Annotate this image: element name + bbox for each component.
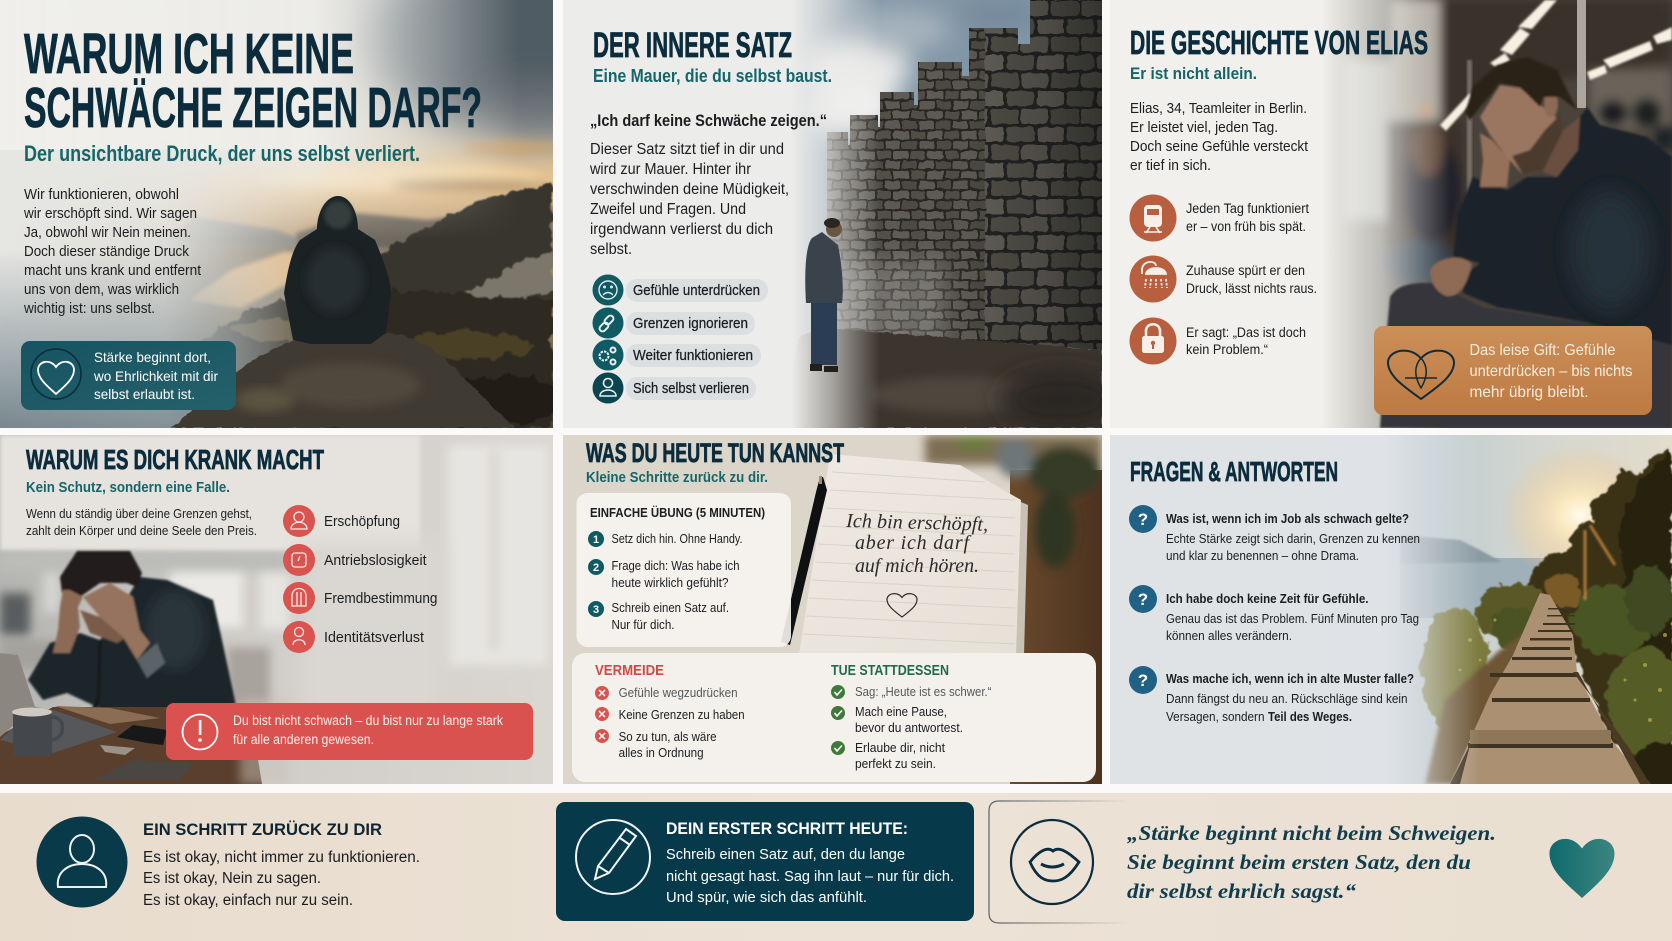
column: Tue stattdessen: bevor du antwortest. (855, 721, 963, 735)
card: simple exercise (576, 493, 791, 647)
list: consequences: Erschöpfung (324, 514, 400, 530)
list: daily pressure: kein Problem.“ (1186, 342, 1268, 357)
title: DER INNERE SATZ (593, 26, 792, 65)
list: daily pressure: er – von früh bis spät. (1186, 219, 1306, 234)
icon: drawn heart (887, 594, 917, 617)
photo: blurred office (0, 435, 553, 784)
card: simple exercise: Schreib einen Satz auf. (612, 601, 729, 615)
list: behaviours: Sich selbst verlieren (633, 381, 749, 397)
icon: warning (182, 714, 218, 750)
list: consequences: Identitätsverlust (324, 630, 424, 646)
body text: Zweifel und Fragen. Und (590, 201, 746, 218)
column: Tue stattdessen (831, 662, 992, 771)
card: simple exercise: 1 (593, 534, 599, 546)
icon: padlock (1142, 324, 1164, 353)
card: simple exercise: 3 (593, 604, 599, 616)
callout: Das leise Gift: Das leise Gift: Gefühle (1470, 342, 1616, 359)
column: Vermeide: alles in Ordnung (619, 746, 704, 760)
footer band (0, 793, 1672, 941)
faq item 1 (1129, 505, 1420, 563)
photo: man facing wall (805, 218, 843, 372)
faq item 1: Was ist, wenn ich im Job als schwach gelte? (1166, 512, 1409, 526)
faq item 3 (1129, 666, 1414, 724)
photo: wooden table and plant (563, 435, 1102, 784)
intro text: wir erschöpft sind. Wir sagen (23, 206, 197, 222)
body text: selbst. (590, 241, 632, 258)
callout: Du bist nicht schwach (166, 703, 533, 760)
body text: irgendwann verlierst du dich (590, 221, 773, 238)
photo: rock (171, 333, 514, 428)
subtitle: Er ist nicht allein. (1130, 64, 1257, 83)
title: DIE GESCHICHTE VON ELIAS (1130, 24, 1428, 61)
faq item 1: ? (1138, 510, 1148, 529)
title: FRAGEN & ANTWORTEN (1130, 456, 1338, 487)
icon: teal heart (1550, 839, 1614, 898)
block: Dein erster Schritt heute: nicht gesagt hast. Sag ihn laut – nur für dich. (666, 868, 954, 885)
title: SCHWÄCHE ZEIGEN DARF? (24, 76, 482, 140)
list: daily pressure: Jeden Tag funktioniert (1186, 201, 1309, 216)
list: behaviours: Grenzen ignorieren (633, 316, 748, 332)
column: Vermeide: Gefühle wegzudrücken (619, 686, 738, 700)
column: Vermeide: Keine Grenzen zu haben (619, 708, 745, 722)
column: Vermeide: VERMEIDE (595, 662, 664, 679)
intro text: macht uns krank und entfernt (24, 263, 201, 279)
title: WARUM ICH KEINE (24, 22, 354, 86)
icon: sad face (599, 281, 617, 299)
icon: broken chain (598, 314, 615, 333)
list: daily pressure: Er sagt: „Das ist doch (1186, 325, 1306, 340)
icon: heart with bottle (1388, 351, 1454, 399)
photo: desk, laptop and mug (0, 653, 262, 784)
icon: heart (38, 362, 74, 394)
story text: Er leistet viel, jeden Tag. (1130, 120, 1278, 136)
panel: Warum es dich krank macht (0, 435, 553, 784)
block: Ein Schritt zurück zu dir: Es ist okay, nicht immer zu funktionieren. (143, 849, 420, 866)
intro text: wichtig ist: uns selbst. (23, 301, 155, 317)
card: simple exercise: Nur für dich. (612, 618, 674, 632)
faq item 3: Dann fängst du neu an. Rückschläge sind kein (1166, 692, 1408, 706)
faq item 2 (1129, 585, 1419, 643)
faq item 2: Ich habe doch keine Zeit für Gefühle. (1166, 592, 1368, 606)
list: consequences (283, 505, 438, 653)
list: behaviours (592, 274, 768, 404)
intro text: Wir funktionieren, obwohl (24, 187, 179, 203)
block: closing quote (989, 801, 1614, 923)
callout: Das leise Gift (1374, 326, 1652, 415)
photo: train interior (1110, 0, 1672, 428)
handwritten note (845, 510, 988, 617)
card: simple exercise: Setz dich hin. Ohne Handy. (612, 532, 742, 546)
story text (1130, 101, 1308, 174)
body text: zahlt dein Körper und deine Seele den Preis. (26, 523, 257, 538)
icon: train (1144, 205, 1162, 233)
panel: Die Geschichte von Elias (1110, 0, 1672, 428)
handwritten note: auf mich hören. (855, 555, 979, 577)
panel: Fragen und Antworten (1110, 435, 1672, 790)
column: Tue stattdessen: perfekt zu sein. (855, 757, 936, 771)
callout: Stärke beginnt dort: wo Ehrlichkeit mit dir (93, 368, 218, 384)
subtitle: Der unsichtbare Druck, der uns selbst verliert. (24, 141, 420, 166)
body text: verschwinden deine Müdigkeit, (590, 181, 789, 198)
block: Ein Schritt zurück zu dir: Es ist okay, einfach nur zu sein. (143, 892, 353, 909)
photo: stone wall and sky (563, 0, 1120, 430)
block: Ein Schritt zurück zu dir: EIN SCHRITT ZURÜCK ZU DIR (143, 820, 382, 839)
photo: notebook page (799, 454, 1028, 655)
photo: pen (781, 476, 827, 645)
body text (589, 141, 789, 258)
list: daily pressure: Druck, lässt nichts raus. (1186, 281, 1317, 296)
card: simple exercise: 2 (593, 562, 599, 574)
column: Vermeide (595, 662, 745, 760)
photo: stressed man (28, 551, 237, 720)
callout: Du bist nicht schwach: für alle anderen gewesen. (233, 732, 374, 747)
card: avoid and do instead (572, 653, 1096, 782)
photo: tired man (1380, 57, 1672, 428)
faq item 3: Was mache ich, wenn ich in alte Muster falle? (1166, 672, 1414, 686)
icon: clock (292, 553, 306, 567)
block: Dein erster Schritt heute: Schreib einen Satz auf, den du lange (666, 846, 905, 863)
faq item 3: Teil des Weges. (1268, 710, 1352, 724)
photo: person on rock above valley (0, 0, 553, 428)
block: Ein Schritt zurück zu dir: Es ist okay, Nein zu sagen. (143, 870, 321, 887)
intro text: uns von dem, was wirklich (24, 282, 179, 298)
column: Tue stattdessen: Mach eine Pause, (855, 705, 947, 719)
icon: person (58, 835, 106, 887)
list: consequences: Fremdbestimmung (324, 591, 438, 607)
icon: exhausted person (291, 512, 307, 529)
title: WAS DU HEUTE TUN KANNST (586, 438, 844, 468)
faq item 2: Genau das ist das Problem. Fünf Minuten pro Tag (1166, 612, 1419, 626)
faq item 1: und klar zu benennen – ohne Drama. (1166, 549, 1359, 563)
callout: Das leise Gift: mehr übrig bleibt. (1470, 384, 1588, 401)
icon: lips (1011, 820, 1093, 904)
faq item 2: ? (1138, 590, 1148, 609)
subtitle: Eine Mauer, die du selbst baust. (593, 66, 832, 86)
story text: Doch seine Gefühle versteckt (1130, 139, 1308, 155)
story text: Elias, 34, Teamleiter in Berlin. (1130, 101, 1307, 117)
body text (26, 506, 257, 538)
body text: Wenn du ständig über deine Grenzen gehst, (26, 506, 252, 521)
card: simple exercise: heute wirklich gefühlt? (612, 576, 729, 590)
list: daily pressure (1130, 194, 1317, 364)
callout: Stärke beginnt dort (21, 341, 236, 410)
title (24, 22, 482, 140)
photo: stepped path (1450, 593, 1650, 784)
subtitle: Kleine Schritte zurück zu dir. (586, 470, 768, 486)
panel: Was du heute tun kannst (563, 435, 1102, 784)
list: behaviours: Gefühle unterdrücken (633, 283, 760, 299)
column: Vermeide: So zu tun, als wäre (619, 730, 717, 744)
panel: Der innere Satz (563, 0, 1120, 430)
block: Dein erster Schritt heute: Und spür, wie sich das anfühlt. (666, 889, 867, 906)
photo: sun rays (1585, 525, 1615, 600)
column: Tue stattdessen: Erlaube dir, nicht (855, 741, 946, 755)
block: Dein erster Schritt heute (556, 802, 974, 921)
intro text: Ja, obwohl wir Nein meinen. (24, 225, 191, 241)
callout: Stärke beginnt dort: selbst erlaubt ist. (94, 386, 195, 402)
title: WARUM ES DICH KRANK MACHT (26, 444, 324, 475)
block: Dein erster Schritt heute: DEIN ERSTER SCHRITT HEUTE: (666, 820, 908, 838)
list: consequences: Antriebslosigkeit (324, 553, 426, 569)
card: simple exercise: Frage dich: Was habe ich (612, 559, 740, 573)
block: closing quote: Sie beginnt beim ersten Satz, den du (1127, 850, 1471, 874)
body text: Dieser Satz sitzt tief in dir und (590, 141, 784, 158)
callout: Du bist nicht schwach: Du bist nicht schwach – du bist nur zu lange stark (233, 713, 503, 728)
block: Ein Schritt zurück zu dir (36, 816, 420, 909)
block: closing quote: dir selbst ehrlich sagst.“ (1127, 879, 1357, 903)
callout: Das leise Gift: unterdrücken – bis nichts (1470, 363, 1632, 380)
photo: hooded figure (284, 196, 391, 344)
story text: er tief in sich. (1130, 158, 1211, 174)
handwritten note: Ich bin erschöpft, (845, 510, 988, 536)
column: Tue stattdessen: TUE STATTDESSEN (831, 662, 949, 679)
body text: wird zur Mauer. Hinter ihr (589, 161, 751, 178)
photo: coastal path at sunset (1110, 435, 1672, 790)
faq item 3: ? (1138, 671, 1148, 690)
faq item 3: Versagen, sondern (1166, 710, 1265, 724)
icon: cage (292, 588, 306, 606)
subtitle: Kein Schutz, sondern eine Falle. (26, 479, 230, 496)
block: closing quote: „Stärke beginnt nicht beim Schweigen. (1127, 821, 1496, 845)
icon: person (600, 378, 616, 396)
icon: fading person (293, 628, 305, 645)
handwritten note: aber ich darf (855, 532, 971, 554)
card: simple exercise: EINFACHE ÜBUNG (5 MINUTEN) (590, 505, 765, 520)
intro text (23, 187, 201, 317)
icon: gears (600, 348, 616, 364)
faq item 1: Echte Stärke zeigt sich darin, Grenzen zu kennen (1166, 532, 1420, 546)
quote: „Ich darf keine Schwäche zeigen.“ (590, 111, 827, 130)
intro text: Doch dieser ständige Druck (24, 244, 190, 260)
list: daily pressure: Zuhause spürt er den (1186, 263, 1305, 278)
photo: foliage highlights (1458, 618, 1667, 722)
icon: shower (1142, 262, 1167, 288)
callout: Stärke beginnt dort: Stärke beginnt dort, (94, 349, 211, 365)
faq item 2: können alles verändern. (1166, 629, 1292, 643)
panel: Warum ich keine Schwäche zeigen darf (0, 0, 553, 428)
list: behaviours: Weiter funktionieren (633, 348, 753, 364)
icon: pencil (595, 829, 636, 879)
column: Tue stattdessen: Sag: „Heute ist es schwer.“ (855, 685, 992, 699)
